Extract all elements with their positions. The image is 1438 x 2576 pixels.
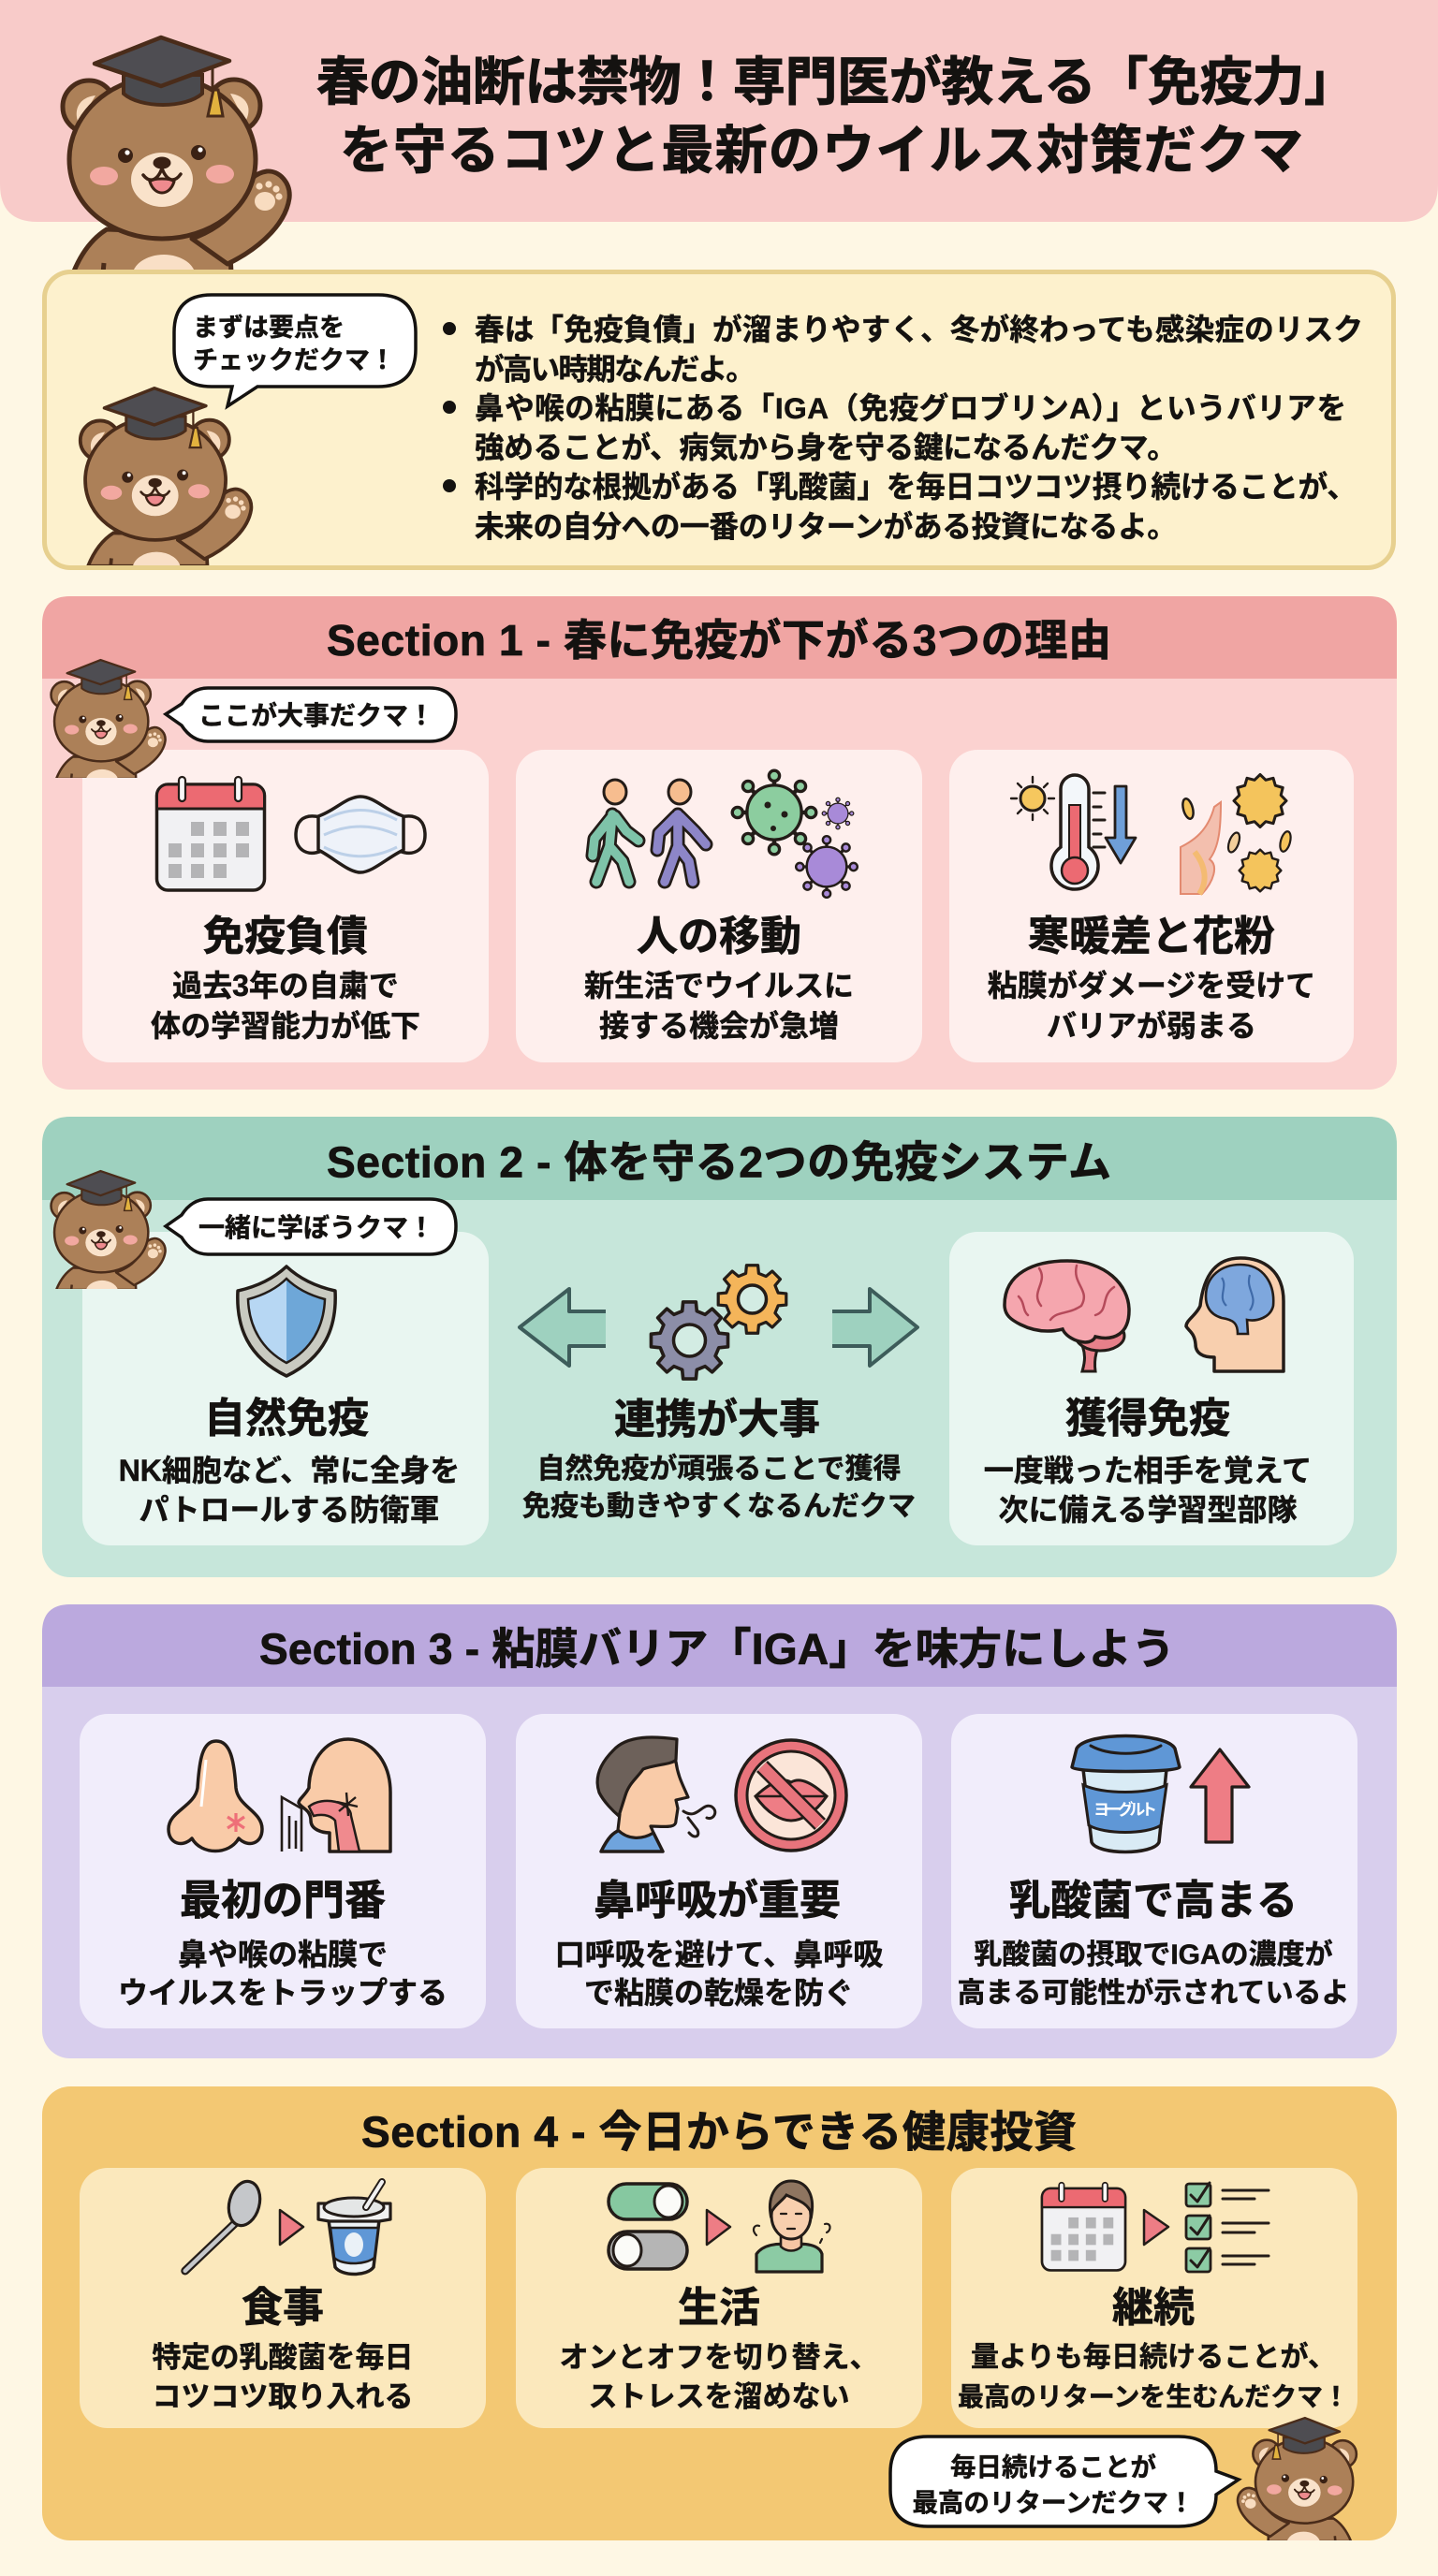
heading: section 1: Section 1 - 春に免疫が下がる3つの理由: [327, 616, 1111, 665]
description: 最初の門番: ウイルスをトラップする: [118, 1976, 448, 2010]
panel: section 4: [42, 2086, 1397, 2555]
speech bubble: summary: チェックだクマ！: [193, 346, 395, 374]
icon: thermometer: [1011, 775, 1105, 889]
description: 連携が大事: 自然免疫が頑張ることで獲得: [536, 1453, 902, 1485]
mascot: section 1 bear: [51, 660, 166, 792]
card: 寒暖差と花粉: [949, 750, 1354, 1062]
description: 継続: 最高のリターンを生むんだクマ！: [958, 2382, 1349, 2411]
heading: section 3: Section 3 - 粘膜バリア「IGA」を味方にしよう: [259, 1625, 1175, 1674]
bullet list: key points: 科学的な根拠がある「乳酸菌」を毎日コツコツ摂り続けることが、: [475, 470, 1357, 504]
card: 乳酸菌で高まる: [951, 1714, 1357, 2028]
description: 食事: [152, 2341, 414, 2413]
mascot: summary bear: [81, 388, 251, 586]
icon: no mouth breathing: [736, 1740, 846, 1851]
description: 食事: 特定の乳酸菌を毎日: [152, 2341, 414, 2374]
icon: calendar: [157, 777, 264, 890]
panel: summary: [45, 271, 1393, 586]
card: 人の移動: [516, 750, 922, 1062]
icon: checklist: [1186, 2183, 1269, 2272]
description: 人の移動: [584, 969, 854, 1043]
label: 獲得免疫: 獲得免疫: [1065, 1396, 1230, 1442]
icon: mask: [296, 797, 425, 872]
icon: yogurt with stick: [318, 2182, 390, 2275]
description: 生活: ストレスを溜めない: [588, 2380, 850, 2413]
description: 免疫負債: 過去3年の自粛で: [172, 969, 399, 1003]
description: 鼻呼吸が重要: [555, 1938, 883, 2010]
label: 連携が大事: 連携が大事: [614, 1397, 820, 1442]
card: 最初の門番: [80, 1714, 486, 2028]
icon: pollen and mucosa: [1181, 775, 1293, 894]
icon: down arrow: [1106, 786, 1136, 863]
heading band: section 1: [42, 596, 1397, 679]
description: 人の移動: 接する機会が急増: [599, 1009, 839, 1043]
icon: calendar small: [1042, 2183, 1125, 2270]
speech bubble: section 1: ここが大事だクマ！: [198, 700, 434, 730]
card: 継続: [951, 2168, 1357, 2428]
description: 人の移動: 新生活でウイルスに: [584, 969, 854, 1003]
bullet list: key points: 未来の自分への一番のリターンがある投資になるよ。: [475, 509, 1177, 543]
speech bubble: section 2: 一緒に学ぼうクマ！: [198, 1213, 434, 1242]
icon: yogurt cup: ヨーグルト: [1093, 1800, 1157, 1819]
arrow: left: [520, 1289, 606, 1366]
arrow: food: [280, 2210, 303, 2245]
description: 最初の門番: 鼻や喉の粘膜で: [178, 1938, 388, 1971]
panel: section 3: [42, 1604, 1397, 2058]
speech bubble: section 2: [166, 1199, 456, 1254]
description: 最初の門番: [118, 1938, 448, 2010]
icon: yogurt cup: [1072, 1735, 1180, 1852]
speech bubble: section 4: [890, 2437, 1239, 2526]
bullet list: key points: 強めることが、病気から身を守る鍵になるんだクマ。: [475, 431, 1177, 464]
description: 乳酸菌で高まる: 乳酸菌の摂取でIGAの濃度が: [974, 1939, 1333, 1970]
description: 獲得免疫: 次に備える学習型部隊: [998, 1493, 1298, 1527]
arrow: continue: [1144, 2210, 1168, 2245]
heading: section 4: Section 4 - 今日からできる健康投資: [361, 2108, 1077, 2157]
icon: toggles: [609, 2184, 687, 2269]
description: 継続: [958, 2341, 1349, 2411]
label: 生活: 生活: [678, 2285, 760, 2331]
description: 寒暖差と花粉: バリアが弱まる: [1047, 1009, 1256, 1043]
label: 最初の門番: 最初の門番: [180, 1878, 386, 1924]
bullet list: key points: 鼻や喉の粘膜にある「IGA（免疫グロブリンA）」というバリアを: [475, 391, 1346, 425]
heading band: section 2: [42, 1117, 1397, 1200]
speech bubble: summary: まずは要点を: [193, 314, 345, 342]
label: 食事: 食事: [242, 2285, 324, 2331]
icon: throat profile: [282, 1739, 390, 1852]
label: 乳酸菌で高まる: 乳酸菌で高まる: [1009, 1878, 1298, 1924]
description: 自然免疫: パトロールする防衛軍: [139, 1493, 439, 1527]
title: 春の油断は禁物！専門医が教える「免疫力」: [316, 52, 1357, 111]
icon: man breathing: [597, 1737, 715, 1852]
label: 自然免疫: 自然免疫: [204, 1396, 369, 1442]
title: を守るコツと最新のウイルス対策だクマ: [340, 121, 1303, 180]
icon: brain: [1005, 1261, 1129, 1371]
label: 鼻呼吸が重要: 鼻呼吸が重要: [594, 1878, 841, 1924]
card: 獲得免疫: [949, 1232, 1354, 1545]
arrow: life: [707, 2210, 730, 2245]
description: 自然免疫: NK細胞など、常に全身を: [119, 1454, 460, 1487]
description: 自然免疫: [119, 1454, 460, 1527]
description: 獲得免疫: [984, 1454, 1312, 1527]
description: 獲得免疫: 一度戦った相手を覚えて: [984, 1454, 1312, 1487]
icon: gears: [651, 1266, 786, 1379]
description: 連携が大事: [522, 1453, 916, 1522]
icon: head with brain: [1186, 1258, 1284, 1371]
description: 寒暖差と花粉: 粘膜がダメージを受けて: [988, 969, 1315, 1003]
speech bubble: section 4: 最高のリターンだクマ！: [912, 2488, 1195, 2517]
description: 乳酸菌で高まる: 高まる可能性が示されているよ: [957, 1977, 1350, 2009]
icon: up arrow: [1191, 1749, 1249, 1842]
bullet list: key points: 春は「免疫負債」が溜まりやすく、冬が終わっても感染症のリスク: [475, 313, 1363, 346]
arrow: right: [832, 1289, 917, 1366]
mascot: section 2 bear: [51, 1171, 166, 1303]
speech bubble: section 1: [166, 688, 456, 741]
description: 乳酸菌で高まる: [957, 1939, 1350, 2009]
card: 食事: [80, 2168, 486, 2428]
icon: walking people: [593, 780, 706, 882]
description: 食事: コツコツ取り入れる: [152, 2380, 414, 2413]
label: 寒暖差と花粉: 寒暖差と花粉: [1028, 914, 1275, 959]
title: [316, 52, 1357, 180]
icon: relaxed person: [754, 2181, 830, 2272]
description: 鼻呼吸が重要: で粘膜の乾燥を防ぐ: [584, 1976, 854, 2010]
bullet list: key points: [443, 313, 1363, 543]
description: 連携が大事: 免疫も動きやすくなるんだクマ: [522, 1491, 916, 1522]
card: 免疫負債: [82, 750, 489, 1062]
description: 免疫負債: 体の学習能力が低下: [151, 1009, 420, 1043]
label: 継続: 継続: [1112, 2285, 1195, 2331]
description: 継続: 量よりも毎日続けることが、: [971, 2341, 1336, 2373]
mascot: header bear: [63, 37, 289, 300]
heading: section 2: Section 2 - 体を守る2つの免疫システム: [327, 1138, 1111, 1187]
label: 免疫負債: 免疫負債: [203, 914, 368, 959]
description: 生活: オンとオフを切り替え、: [560, 2341, 878, 2374]
description: 生活: [560, 2341, 878, 2413]
label: 人の移動: 人の移動: [637, 914, 801, 959]
speech bubble: summary: [174, 295, 416, 406]
card: 生活: [516, 2168, 922, 2428]
icon: nose: [169, 1741, 262, 1852]
card: 自然免疫: [82, 1232, 489, 1545]
speech bubble: section 4: 毎日続けることが: [950, 2452, 1156, 2481]
heading band: section 3: [42, 1604, 1397, 1687]
icon: viruses: [732, 770, 858, 898]
panel: section 2: [42, 1117, 1397, 1577]
icon: shield: [238, 1266, 335, 1376]
panel: section 1: [42, 596, 1397, 1090]
bullet list: key points: が高い時期なんだよ。: [475, 352, 756, 386]
header banner: [0, 0, 1438, 222]
mascot: section 4 bear: [1238, 2418, 1357, 2555]
card: 鼻呼吸が重要: [516, 1714, 922, 2028]
icon: spoon: [182, 2178, 265, 2271]
description: 鼻呼吸が重要: 口呼吸を避けて、鼻呼吸: [555, 1938, 883, 1971]
description: 寒暖差と花粉: [988, 969, 1315, 1043]
description: 免疫負債: [151, 969, 420, 1043]
